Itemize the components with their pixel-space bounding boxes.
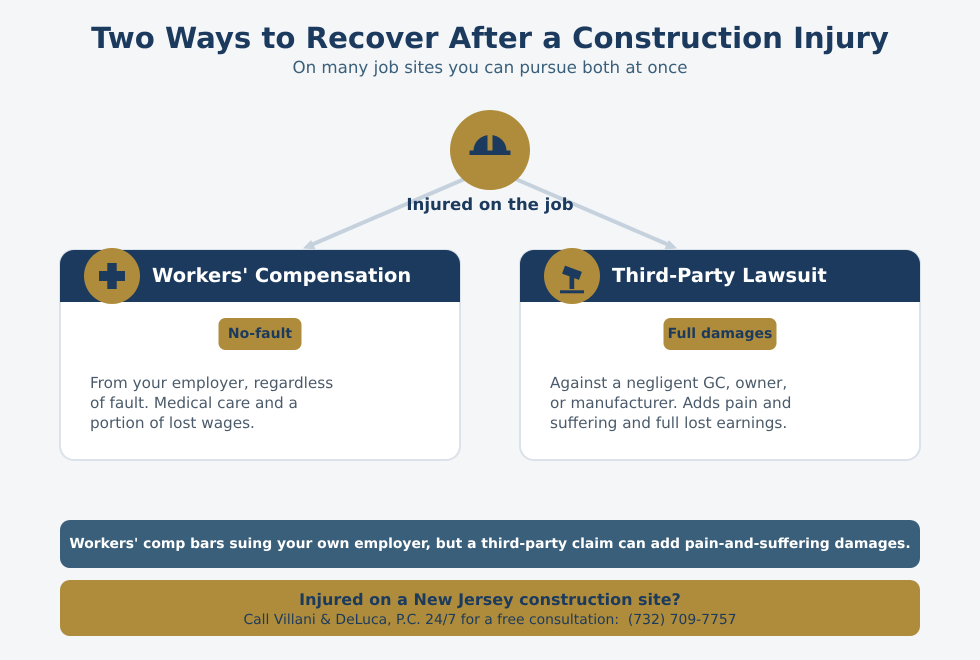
panel body text: From your employer, regardless [90,374,333,392]
subtitle: On many job sites you can pursue both at once [292,58,688,77]
panel header [60,250,460,302]
badge: no-fault [218,318,302,350]
callout: key takeaway: Workers' comp bars suing your own employer, but a third-party claim can add pain-and-suffering damages. [69,536,911,552]
call to action [60,580,920,636]
panel heading: Third-Party Lawsuit [612,264,827,287]
callout: key takeaway [60,520,920,568]
panel body text: portion of lost wages. [90,414,255,432]
icon: gavel [544,248,600,304]
panel body text: of fault. Medical care and a [90,394,298,412]
badge: no-fault: No-fault [228,326,292,342]
call to action: Call Villani & DeLuca, P.C. 24/7 for a free consultation: (732) 709-7757 [243,612,737,628]
icon: medical cross [84,248,140,304]
panel body text: suffering and full lost earnings. [550,414,787,432]
call to action: Injured on a New Jersey construction site? [299,590,681,609]
panel: third-party lawsuit [0,0,920,460]
panel heading: Workers' Compensation [152,264,411,287]
badge: full damages [664,318,776,350]
panel header [520,250,920,302]
icon: hard hat [450,110,530,190]
panel body text: or manufacturer. Adds pain and [550,394,791,412]
badge: full damages: Full damages [668,326,772,342]
title: Two Ways to Recover After a Construction Injury [91,21,889,55]
arrow: to third-party lawsuit [490,168,676,249]
start label: Injured on the job [406,195,574,214]
panel body text: Against a negligent GC, owner, [550,374,787,392]
panel: workers' compensation [0,0,460,460]
arrow: to workers' compensation [304,168,490,249]
